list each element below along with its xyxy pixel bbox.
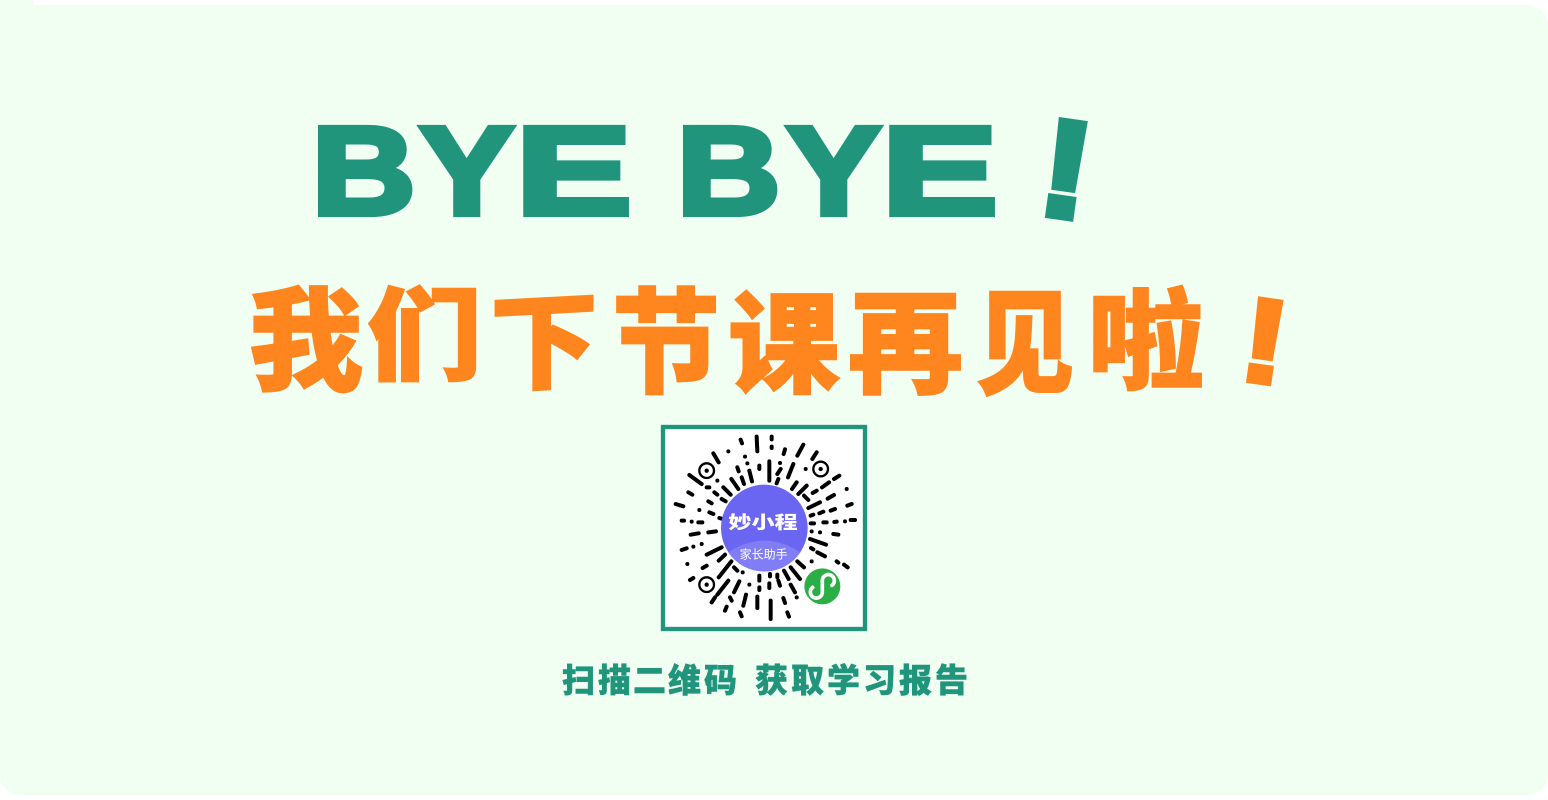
QR code card: [660, 424, 868, 632]
QR radial dashes: [676, 437, 855, 619]
heading: BYE BYE: [312, 90, 1102, 249]
logo: purple circle: [721, 485, 808, 572]
logo: purple circle: 家长助手: [740, 547, 788, 562]
heading: BYE BYE: !: [1031, 90, 1102, 249]
heading: BYE BYE: Y: [787, 102, 880, 241]
heading: see you next lesson: 课: [728, 285, 840, 408]
heading: see you next lesson: !: [1232, 271, 1297, 411]
finder eyes: [699, 462, 828, 592]
heading: BYE BYE: B: [677, 101, 780, 241]
heading: BYE BYE: Y: [420, 102, 513, 241]
caption: scan QR code: 扫描二维码获取学习报告: [562, 662, 968, 699]
heading: see you next lesson: 再: [848, 283, 963, 409]
heading: see you next lesson: 下: [490, 283, 598, 406]
heading: see you next lesson: 我: [249, 280, 363, 405]
heading: see you next lesson: [249, 271, 1297, 411]
heading: BYE BYE: B: [312, 101, 415, 241]
heading: see you next lesson: 们: [367, 281, 482, 393]
heading: see you next lesson: 见: [976, 282, 1074, 410]
heading: BYE BYE: E: [516, 101, 631, 241]
logo: purple circle: 妙小程: [728, 513, 798, 533]
heading: see you next lesson: 啦: [1088, 283, 1204, 403]
icon: mini program: [804, 568, 840, 604]
heading: BYE BYE: E: [882, 101, 997, 241]
heading: see you next lesson: 节: [612, 280, 720, 409]
